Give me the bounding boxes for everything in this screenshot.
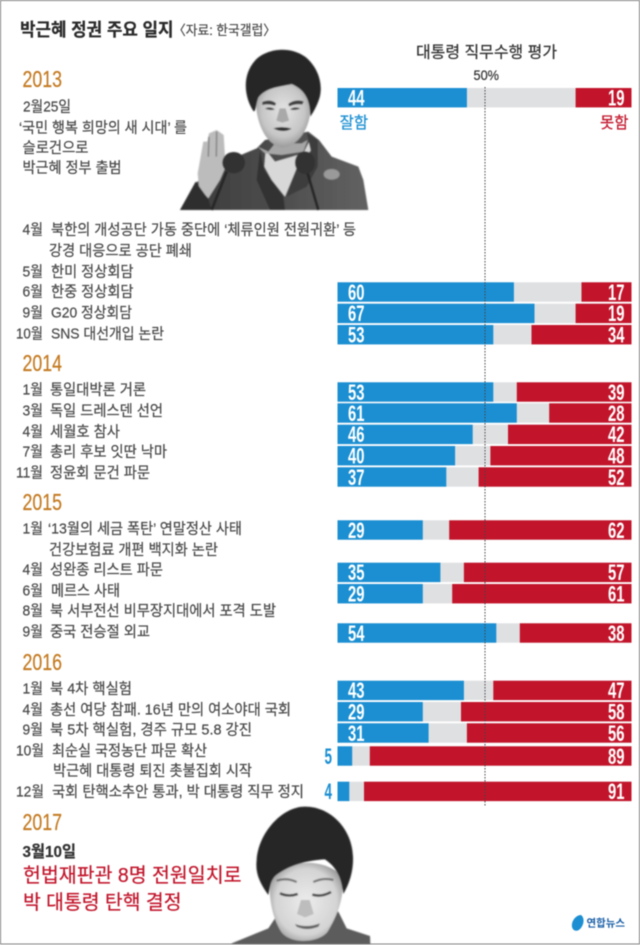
vote panel: 2016: [16, 649, 632, 804]
event: December: 12월: [16, 784, 44, 800]
bar: 29 / 62: 29: [348, 518, 364, 543]
bar: 29 / 61: 29: [348, 582, 364, 606]
event: October: 최순실 국정농단 파문 확산: [52, 742, 207, 760]
photo: oath portrait: [180, 50, 368, 210]
event: March: 3월: [22, 402, 43, 420]
event: June: [22, 582, 120, 600]
event: April: 성완종 리스트 파문: [50, 562, 163, 578]
bar: 4 / 91: [324, 779, 632, 804]
verdict headline: 헌법재판관 8명 전원일치로: [23, 864, 242, 887]
bar: 53 / 34: 34: [608, 322, 625, 348]
event: September: 9월: [22, 624, 43, 640]
year heading: 2016: 2016: [22, 649, 62, 675]
year heading: 2014: 2014: [22, 350, 62, 376]
event: September: G20 정상회담: [51, 304, 132, 322]
event: September: [22, 304, 132, 322]
bar: 43 / 47: 43: [348, 678, 364, 703]
event: April: [22, 424, 120, 440]
bar: 60 / 17: [338, 280, 632, 305]
event: April: 4월: [22, 424, 43, 440]
event: September: 북 5차 핵실험, 경주 규모 5.8 강진: [50, 722, 252, 738]
bar: 31 / 56: 56: [608, 721, 624, 746]
event: April: 4월: [22, 702, 43, 718]
event: September: 중국 전승절 외교: [50, 624, 150, 640]
icon: logo mark: [572, 915, 584, 931]
source note: 〈자료: 한국갤럽〉: [173, 23, 276, 38]
event: April: 4월: [22, 562, 43, 578]
event: August: 8월: [22, 602, 43, 620]
event: June: 6월: [22, 284, 43, 300]
bar: 53 / 34: 53: [348, 322, 364, 348]
bar: 37 / 52: [338, 465, 632, 490]
bar: 29 / 58: 29: [348, 700, 364, 724]
event: January: 통일대박론 거론: [50, 382, 146, 398]
photo: closing portrait: [232, 807, 370, 944]
event text: inauguration: 슬로건으로: [22, 140, 89, 156]
event: April: 4월: [22, 222, 43, 238]
bar: 61 / 28: 61: [348, 401, 364, 426]
bar: 44 / 19: [338, 86, 632, 110]
legend: approve: 잘함: [340, 114, 368, 132]
event: October: [16, 742, 252, 780]
event: January: ‘13월의 세금 폭탄’ 연말정산 사태: [48, 520, 242, 538]
event: July: 7월: [22, 444, 43, 460]
bar: 53 / 34: [338, 322, 632, 348]
bar: 40 / 48: [338, 444, 632, 468]
bar: 61 / 28: [338, 401, 632, 426]
vote panel: 2015: [22, 489, 632, 646]
year heading: 2013: 2013: [22, 66, 62, 92]
bar: 5 / 89: 89: [608, 744, 624, 769]
bar: 29 / 58: 58: [608, 700, 624, 724]
bar: 35 / 57: 35: [348, 560, 364, 585]
bar: 53 / 39: 39: [608, 380, 624, 405]
event: October: SNS 대선개입 논란: [51, 326, 164, 342]
event: April: [22, 222, 356, 260]
bar: 67 / 19: 19: [608, 301, 624, 326]
event: December: 국회 탄핵소추안 통과, 박 대통령 직무 정지: [52, 784, 304, 800]
event: June: 6월: [22, 582, 43, 600]
logo: Yonhap News: [572, 915, 625, 931]
event: January: [22, 520, 242, 558]
logo wordmark: 연합뉴스: [586, 916, 625, 930]
bar: 44 / 19: 19: [608, 86, 624, 110]
bar: 46 / 42: 46: [348, 422, 364, 447]
event: May: 한미 정상회담: [51, 264, 134, 280]
bar: 60 / 17: 60: [348, 280, 364, 305]
bar: 54 / 38: 38: [608, 621, 624, 646]
title: 박근혜 정권 주요 일지: [20, 20, 174, 40]
event text: inauguration: 박근혜 정부 출범: [22, 160, 122, 176]
bar: 37 / 52: 37: [348, 465, 364, 490]
bar: 35 / 57: 57: [608, 560, 624, 585]
event: April: 북한의 개성공단 가동 중단에 ‘체류인원 전원귀환’ 등: [51, 222, 356, 238]
bar: 43 / 47: [338, 678, 632, 703]
bar: 60 / 17: 17: [608, 280, 624, 305]
year heading: 2017: 2017: [22, 809, 62, 835]
bar: 29 / 62: 62: [608, 518, 624, 543]
bar: 40 / 48: 48: [608, 444, 624, 468]
50 percent label: 50%: [474, 67, 499, 83]
event text: inauguration: 2월25일: [23, 98, 71, 116]
event: September: 9월: [22, 304, 43, 322]
chart heading: 대통령 직무수행 평가: [416, 44, 557, 62]
event: March: 독일 드레스덴 선언: [50, 402, 163, 420]
year heading: 2015: 2015: [22, 489, 62, 515]
event: October: 박근혜 대통령 퇴진 촛불집회 시작: [53, 762, 252, 780]
bar: 44 / 19: 44: [348, 86, 365, 110]
bar: 29 / 62: [338, 518, 632, 543]
bar: 4 / 91: 4: [324, 779, 332, 804]
bar: 5 / 89: 5: [324, 744, 332, 769]
event: October: 10월: [16, 742, 44, 760]
bar: 37 / 52: 52: [608, 465, 624, 490]
event: November: 11월: [16, 464, 43, 482]
event: April: 세월호 참사: [50, 424, 120, 440]
event: January: 1월: [22, 520, 43, 538]
bar: 29 / 61: 61: [608, 582, 624, 606]
legend: disapprove: 못함: [600, 114, 629, 132]
bar: 29 / 61: [338, 582, 632, 606]
bar: 5 / 89: [324, 744, 632, 769]
bar: 29 / 58: [338, 700, 632, 724]
event: January: 1월: [22, 382, 43, 398]
bar: 40 / 48: 40: [348, 444, 364, 468]
bar: 54 / 38: 54: [348, 621, 365, 646]
bar: 54 / 38: [338, 621, 632, 646]
bar: 4 / 91: 91: [608, 779, 624, 804]
bar: 67 / 19: 67: [348, 301, 364, 326]
event: June: 한중 정상회담: [51, 284, 134, 300]
bar: 67 / 19: [338, 301, 632, 326]
vote panel: 2014: [16, 350, 632, 490]
event text: inauguration: [19, 98, 187, 176]
bar: 53 / 39: 53: [348, 380, 364, 405]
event: July: 총리 후보 잇딴 낙마: [50, 444, 167, 460]
verdict headline: [23, 864, 242, 914]
vote panel: 2013: [16, 66, 632, 348]
event: April: 총선 여당 참패. 16년 만의 여소야대 국회: [50, 702, 291, 718]
panel: 2017: [22, 809, 242, 914]
event: January: 북 4차 핵실험: [50, 680, 132, 698]
date: 3월10일: [22, 843, 76, 861]
bar: 53 / 39: [338, 380, 632, 405]
bar: 61 / 28: 28: [608, 401, 624, 426]
bar: 46 / 42: [338, 422, 632, 447]
event: April: 강경 대응으로 공단 폐쇄: [49, 242, 192, 260]
verdict headline: 박 대통령 탄핵 결정: [23, 891, 182, 914]
bar: 35 / 57: [338, 560, 632, 585]
event text: inauguration: ‘국민 행복 희망의 새 시대’ 를: [19, 120, 187, 136]
bar: 46 / 42: 42: [608, 422, 624, 447]
event: September: 9월: [22, 722, 43, 738]
event: January: 건강보험료 개편 백지화 논란: [49, 542, 218, 558]
bar: 43 / 47: 47: [608, 678, 624, 703]
event: January: 1월: [22, 680, 43, 698]
event: November: 정윤회 문건 파문: [50, 464, 150, 482]
event: August: 북 서부전선 비무장지대에서 포격 도발: [50, 602, 276, 620]
event: October: 10월: [16, 326, 43, 342]
event: June: 메르스 사태: [51, 582, 120, 600]
bar: 31 / 56: [338, 721, 632, 746]
event: May: 5월: [22, 264, 43, 280]
bar: 31 / 56: 31: [348, 721, 364, 746]
